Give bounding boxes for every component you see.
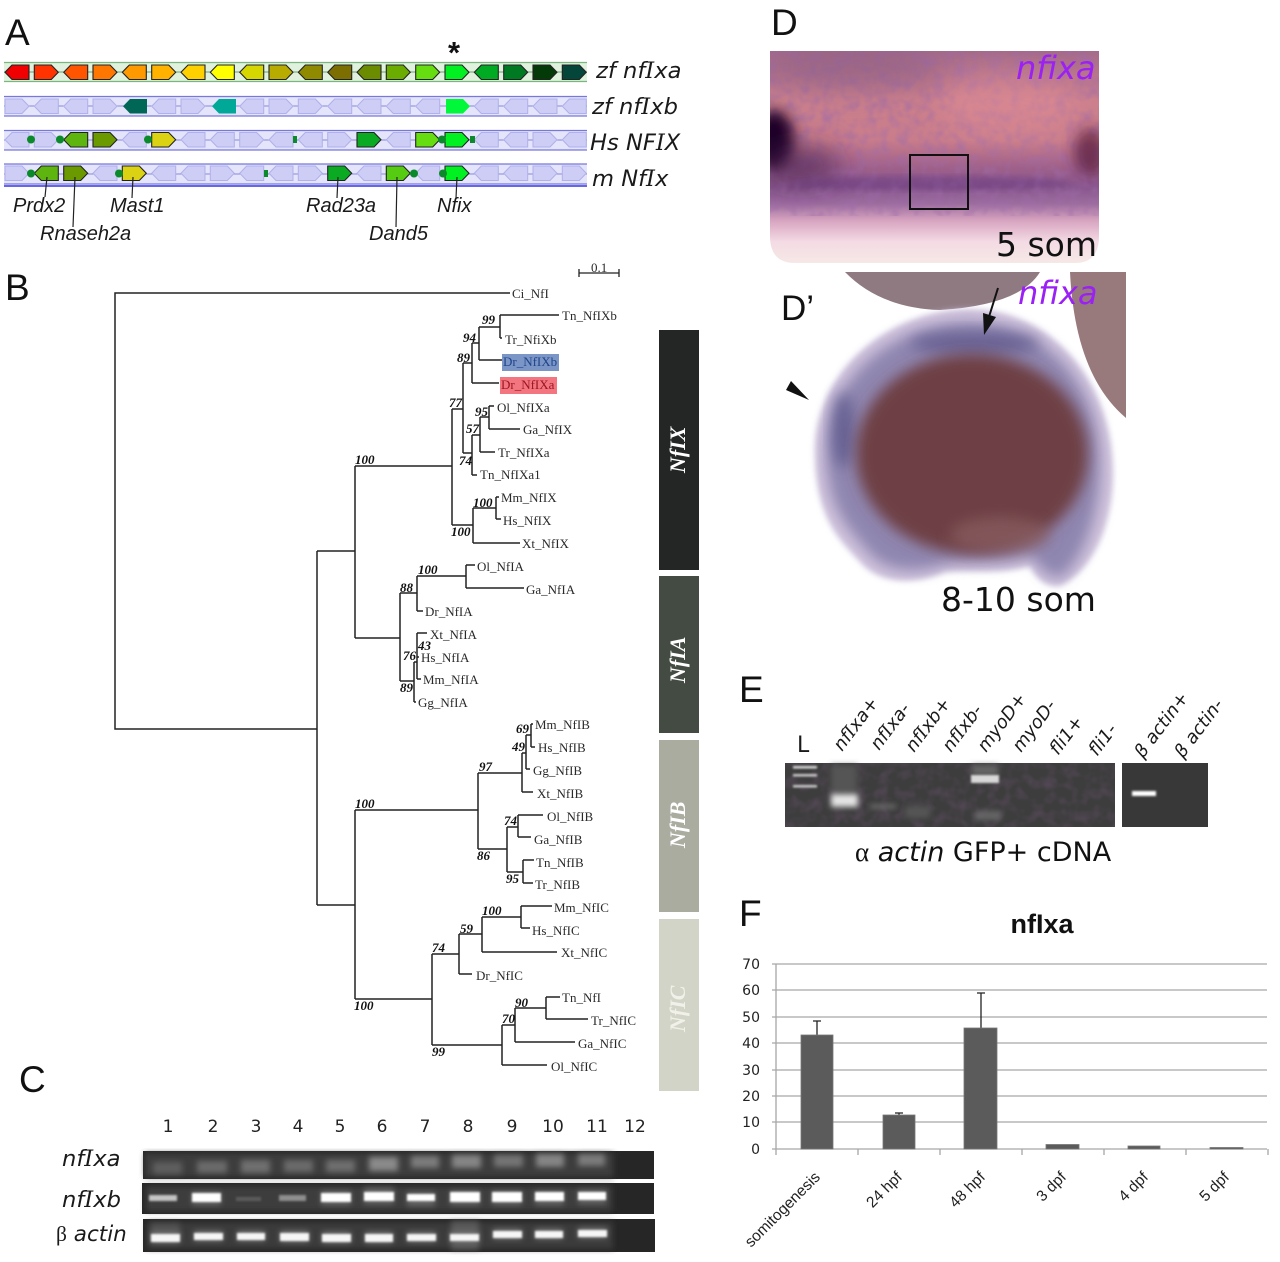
x axis labels: 4 dpf: [1115, 1168, 1152, 1205]
clade NfIX: 100: [355, 452, 375, 467]
gene labels: Rad23a: [306, 195, 376, 217]
sidebar: NfIX: NfIX: [665, 425, 690, 474]
clade NfIA: [355, 559, 576, 710]
gel: main: [785, 763, 1115, 827]
sidebar: NfIX: [659, 330, 699, 570]
label: 8-10 som: 8-10 som: [941, 580, 1096, 619]
scale bar: [579, 260, 619, 277]
panel B: phylogenetic tree: [115, 260, 699, 1091]
clade NfIX: 100: [451, 524, 471, 539]
clade NfIX: Tr_NfIXa: [498, 445, 550, 460]
clade NfIX: [355, 308, 617, 551]
track: m NfIx: [4, 164, 587, 186]
gene labels: Prdx2: [13, 195, 65, 217]
error bars: [813, 993, 985, 1115]
clade NfIB: 49: [511, 739, 526, 754]
sidebar: NfIC: NfIC: [665, 985, 690, 1033]
x axis labels: somitogenesis: [742, 1169, 824, 1251]
row labels: nfIxa: [62, 1146, 120, 1172]
lane labels: [797, 688, 1228, 763]
clade NfIB: Xt_NfIB: [537, 786, 584, 801]
panel letter C: C: [19, 1059, 46, 1100]
clade NfIX: Xt_NfIX: [522, 536, 570, 551]
y axis labels: 40: [742, 1036, 760, 1052]
lane numbers: 1: [163, 1117, 173, 1137]
clade NfIC: Tn_NfI: [562, 990, 601, 1005]
star marker: *: [448, 35, 461, 70]
sidebar: NfIC: [659, 919, 699, 1091]
gene labels: Nfix: [437, 195, 472, 217]
clade NfIC: 74: [432, 940, 446, 955]
clade NfIA: 100: [418, 562, 438, 577]
x axis labels: 48 hpf: [946, 1168, 989, 1211]
track: Hs NFIX: [4, 130, 587, 150]
clade NfIB: 69: [516, 721, 530, 736]
clade NfIA: 88: [400, 580, 414, 595]
track labels: [590, 58, 681, 192]
y axis labels: 20: [742, 1089, 760, 1105]
gene leader lines: [45, 177, 457, 227]
tree root and backbone: [115, 286, 549, 999]
clade NfIA: 89: [400, 680, 414, 695]
clade NfIX: Tr_NfiXb: [505, 332, 557, 347]
lane labels: nfIxb+: [901, 694, 955, 756]
clade NfIX: Ol_NfIXa: [497, 400, 550, 415]
clade NfIC: 100: [482, 903, 502, 918]
x axis labels: 3 dpf: [1033, 1168, 1070, 1205]
lane labels: myoD+: [973, 689, 1031, 756]
panel letter D: D: [771, 2, 798, 43]
lane numbers: 3: [251, 1117, 261, 1137]
clade NfIA: Ol_NfIA: [477, 559, 525, 574]
chart title: nfIxa: [1010, 909, 1074, 939]
clade NfIC: 59: [460, 921, 474, 936]
gel: nfIxb: [142, 1183, 654, 1214]
clade NfIC: Hs_NfIC: [532, 923, 580, 938]
clade NfIC: 99: [432, 1044, 446, 1059]
lane numbers: 12: [624, 1117, 646, 1137]
clade NfIB: 97: [479, 759, 492, 774]
panel letter A: A: [5, 12, 30, 53]
clade NfIA: Xt_NfIA: [430, 627, 478, 642]
gene labels: [13, 195, 472, 245]
clade NfIC: Dr_NfIC: [476, 968, 523, 983]
clade NfIC: Mm_NfIC: [554, 900, 609, 915]
y axis labels: 0: [751, 1142, 760, 1158]
lane labels: β actin+: [1130, 688, 1193, 763]
bars: [801, 1028, 1243, 1149]
clade NfIA: Ga_NfIA: [526, 582, 576, 597]
scale bar: 0.1: [591, 260, 607, 275]
clade NfIB: [355, 717, 594, 892]
gene labels: Rnaseh2a: [40, 223, 131, 245]
clade NfIB: 74: [504, 813, 518, 828]
lane labels: fli1-: [1084, 720, 1122, 760]
track labels: Hs NFIX: [590, 130, 681, 156]
lane labels: nfIxb-: [938, 701, 987, 756]
lane labels: β actin-: [1170, 695, 1228, 763]
x axis labels: 5 dpf: [1196, 1168, 1233, 1205]
clade NfIB: Tr_NfIB: [535, 877, 580, 892]
clade NfIX: 74: [459, 453, 472, 468]
lane labels: nfIxa+: [829, 693, 883, 755]
row labels: nfIxb: [62, 1187, 121, 1213]
clade NfIB: Ol_NfIB: [547, 809, 594, 824]
lane numbers: 4: [293, 1117, 303, 1137]
row labels: β actin: [56, 1222, 127, 1247]
clade NfIC: 70: [502, 1011, 516, 1026]
clade NfIB: Tn_NfIB: [536, 855, 584, 870]
gel: nfIxa: [143, 1151, 654, 1179]
x axis labels: [742, 1168, 1233, 1251]
embryo body: [815, 309, 1113, 586]
panel letter B: B: [5, 267, 30, 308]
y axis labels: 10: [742, 1115, 760, 1131]
lane numbers: 6: [377, 1117, 387, 1137]
caption: α actin GFP+ cDNA: [855, 837, 1112, 868]
clade NfIC: [354, 900, 636, 1074]
panel C: RT-PCR gels: [56, 1117, 655, 1252]
sidebar: NfIA: [659, 576, 699, 733]
sidebar: NfIB: NfIB: [665, 802, 690, 849]
sidebar: NfIB: [659, 740, 699, 912]
panel letter D prime: D’: [781, 289, 814, 328]
y axis labels: 50: [742, 1010, 760, 1026]
y axis labels: 60: [742, 983, 760, 999]
gene labels: Mast1: [110, 195, 164, 217]
label: 5 som: 5 som: [996, 225, 1097, 264]
lane labels: myoD-: [1008, 696, 1061, 756]
clade NfIX: 95: [475, 404, 488, 419]
clade NfIX: 100: [473, 495, 493, 510]
clade NfIX: Tn_NfIXb: [562, 308, 617, 323]
clade NfIC: 90: [515, 995, 528, 1010]
track labels: zf nfIxa: [595, 58, 681, 84]
arrow: [983, 288, 998, 335]
y axis labels: 70: [742, 957, 760, 973]
row labels: [56, 1146, 127, 1247]
clade NfIX: Dr_NfIXb: [503, 354, 557, 369]
lane numbers: 9: [507, 1117, 517, 1137]
lane numbers: 10: [542, 1117, 564, 1137]
y axis labels: [742, 957, 760, 1158]
lane numbers: 5: [335, 1117, 345, 1137]
gel: beta actin: [1122, 763, 1208, 827]
panel letter E: E: [739, 669, 764, 710]
clade NfIX: Tn_NfIXa1: [480, 467, 541, 482]
clade NfIB: Ga_NfIB: [534, 832, 583, 847]
y axis labels: 30: [742, 1063, 760, 1079]
clade NfIX: Mm_NfIX: [501, 490, 557, 505]
clade NfIX: 57: [466, 421, 480, 436]
gene labels: Dand5: [369, 223, 429, 245]
clade NfIC: Ol_NfIC: [551, 1059, 597, 1074]
track labels: zf nfIxb: [591, 94, 678, 120]
clade NfIB: 86: [477, 848, 490, 863]
clade NfIX: Dr_NfIXa: [501, 377, 555, 392]
inset box: [910, 155, 968, 209]
clade NfIB: 95: [506, 871, 520, 886]
clade NfIX: 89: [457, 350, 470, 365]
neighbouring embryos: [845, 272, 1126, 418]
clade NfIA: Mm_NfIA: [423, 672, 479, 687]
clade NfIC: Tr_NfIC: [591, 1013, 636, 1028]
label: nfixa: nfixa: [1016, 49, 1096, 87]
x axis labels: 24 hpf: [863, 1168, 906, 1211]
clade NfIA: 76: [403, 648, 416, 663]
arrowhead: [786, 381, 809, 400]
lane labels: nfIxa-: [866, 699, 915, 754]
lane numbers: 11: [586, 1117, 608, 1137]
clade NfIX: 94: [463, 330, 476, 345]
track: zf nfIxa: [4, 62, 587, 82]
panel D: 5 somite embryo image: [754, 48, 1106, 264]
panel letter F: F: [739, 893, 762, 934]
clade NfIA: 43: [417, 638, 432, 653]
clade NfIA: Hs_NfIA: [421, 650, 470, 665]
clade NfIB: Gg_NfIB: [533, 763, 582, 778]
lane numbers: [163, 1117, 646, 1137]
clade NfIX: Ga_NfIX: [523, 422, 573, 437]
clade NfIX: Hs_NfIX: [503, 513, 552, 528]
panel E: alpha actin GFP+ gel: [785, 688, 1228, 868]
clade NfIC: Ga_NfIC: [578, 1036, 626, 1051]
clade NfIC: 100: [354, 998, 374, 1013]
sidebar: NfIA: NfIA: [665, 637, 690, 684]
track labels: m NfIx: [592, 166, 669, 192]
clade NfIB: Mm_NfIB: [535, 717, 590, 732]
lane labels: L: [797, 733, 810, 758]
clade NfIB: 100: [355, 796, 375, 811]
panel D': 8-10 somite embryo image: [786, 272, 1126, 619]
panel A: synteny gene tracks: [4, 35, 681, 245]
clade NfIA: Dr_NfIA: [425, 604, 473, 619]
lane numbers: 2: [208, 1117, 218, 1137]
label: nfixa: nfixa: [1018, 274, 1098, 312]
lane numbers: 8: [463, 1117, 473, 1137]
track: zf nfIxb: [4, 96, 587, 116]
lane labels: fli1+: [1045, 712, 1088, 759]
gridlines and axes: [772, 964, 1268, 1155]
clade NfIA: Gg_NfIA: [418, 695, 468, 710]
clade NfIC: Xt_NfIC: [561, 945, 607, 960]
clade NfIX: 77: [449, 395, 462, 410]
clade NfIB: Hs_NfIB: [538, 740, 586, 755]
lane numbers: 7: [420, 1117, 430, 1137]
panel F: nfIxa bar chart: [742, 909, 1268, 1251]
clade NfIX: 99: [482, 312, 496, 327]
gel: beta actin: [143, 1219, 655, 1252]
tree root and backbone: Ci_NfI: [512, 286, 549, 301]
